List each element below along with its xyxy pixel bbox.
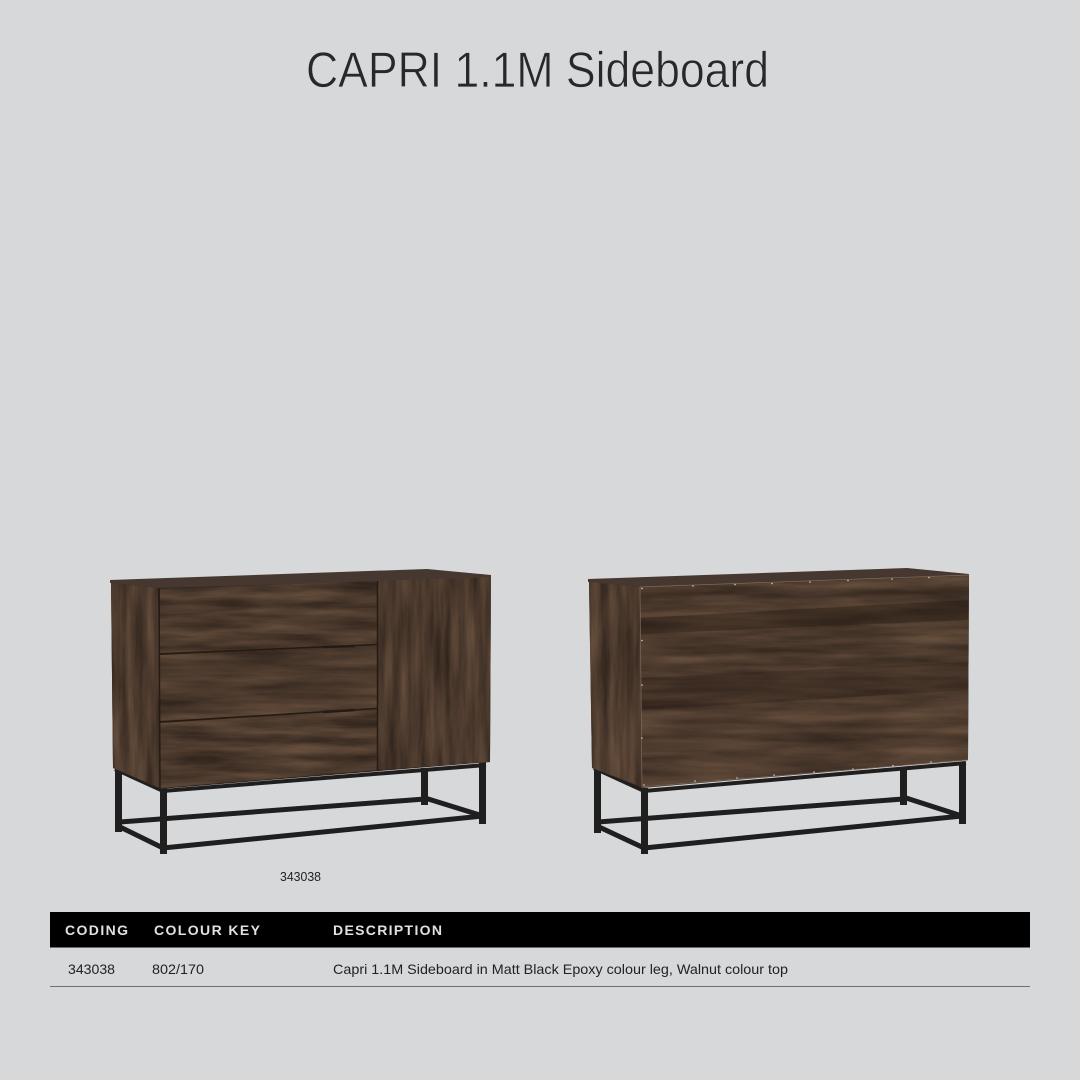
table header bar — [50, 912, 1030, 948]
header: colour key: COLOUR KEY — [154, 922, 261, 938]
header: description: DESCRIPTION — [333, 922, 442, 938]
table — [50, 912, 1030, 987]
back panel — [635, 570, 975, 792]
cabinet body base — [589, 575, 969, 788]
title: CAPRI 1.1M Sideboard — [306, 42, 769, 98]
cabinet top — [588, 568, 969, 587]
drawer 3 — [160, 710, 377, 788]
cabinet top — [110, 569, 491, 588]
metal leg frame, back view — [594, 762, 966, 854]
metal leg frame, front view — [115, 762, 486, 854]
cabinet side panel — [111, 583, 160, 788]
drawer 2 — [160, 645, 377, 721]
product code caption: 343038 — [280, 870, 321, 884]
product image: sideboard back view — [585, 568, 975, 854]
back panel edge — [640, 575, 969, 787]
screws — [641, 577, 932, 786]
cell: code: 343038 — [68, 961, 115, 977]
cell: description: Capri 1.1M Sideboard in Matt Black Epoxy colour leg, Walnut colour top — [333, 961, 788, 977]
drawer 1 — [160, 581, 377, 653]
drawer gaps and handles — [159, 581, 378, 788]
cell: colour key: 802/170 — [152, 961, 204, 977]
header: coding: CODING — [65, 922, 128, 938]
product image: sideboard front view — [105, 569, 495, 854]
cabinet side panel — [589, 582, 642, 786]
cabinet body base — [111, 577, 491, 789]
cabinet door — [378, 577, 491, 770]
table row — [50, 961, 1030, 987]
